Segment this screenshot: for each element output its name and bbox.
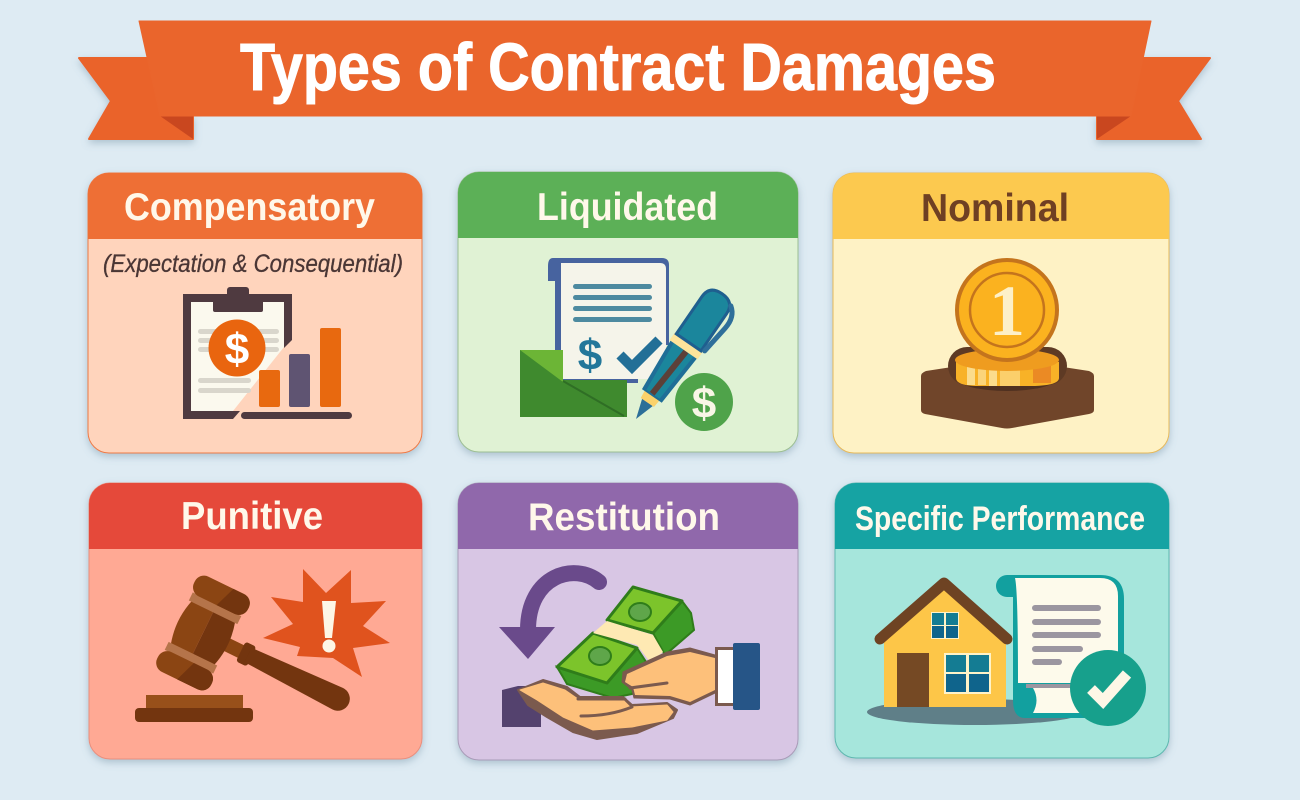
card body [89,483,422,759]
card header [458,483,798,549]
panel: punitive [89,483,422,759]
subtitle: (Expectation & Consequential) [103,250,403,278]
banner right tail [1097,58,1210,139]
card body [458,483,798,760]
icon: house and signed deed [867,575,1146,726]
icon: one dollar coin on pedestal [921,260,1094,428]
heading: Nominal [921,187,1069,230]
icon: one dollar coin on pedestal: 1 [989,271,1025,351]
icon: clipboard with dollar and bar chart: $ [225,325,249,374]
panel: compensatory [88,173,422,453]
card header [89,483,422,549]
title banner [79,21,1210,139]
title text: Types of Contract Damages [240,30,996,105]
banner right fold [1097,116,1131,139]
banner left tail [79,58,193,139]
card body [458,172,798,452]
card header [458,172,798,238]
icon: contract, envelope, pen and dollar coin: $ [692,379,716,428]
heading: Specific Performance [855,500,1145,538]
panel: restitution [458,483,798,760]
panel: nominal [833,173,1169,453]
banner main ribbon [139,21,1151,116]
card body [833,173,1169,453]
card header [833,173,1169,239]
icon: contract, envelope, pen and dollar coin [520,258,740,432]
heading: Punitive [181,495,323,538]
heading: Restitution [528,496,720,539]
icon: gavel and starburst [135,569,390,752]
card body [88,173,422,453]
icon: clipboard with dollar and bar chart [183,287,352,419]
panel: specific performance [835,483,1169,758]
heading: Liquidated [537,186,718,229]
icon: contract, envelope, pen and dollar coin: $ [578,331,602,380]
card header [88,173,422,239]
panel: liquidated [458,172,798,452]
card header [835,483,1169,549]
banner left fold [160,116,193,139]
icon: money exchanged between hands with return arrow [499,573,760,739]
card body [835,483,1169,758]
heading: Compensatory [124,186,375,229]
